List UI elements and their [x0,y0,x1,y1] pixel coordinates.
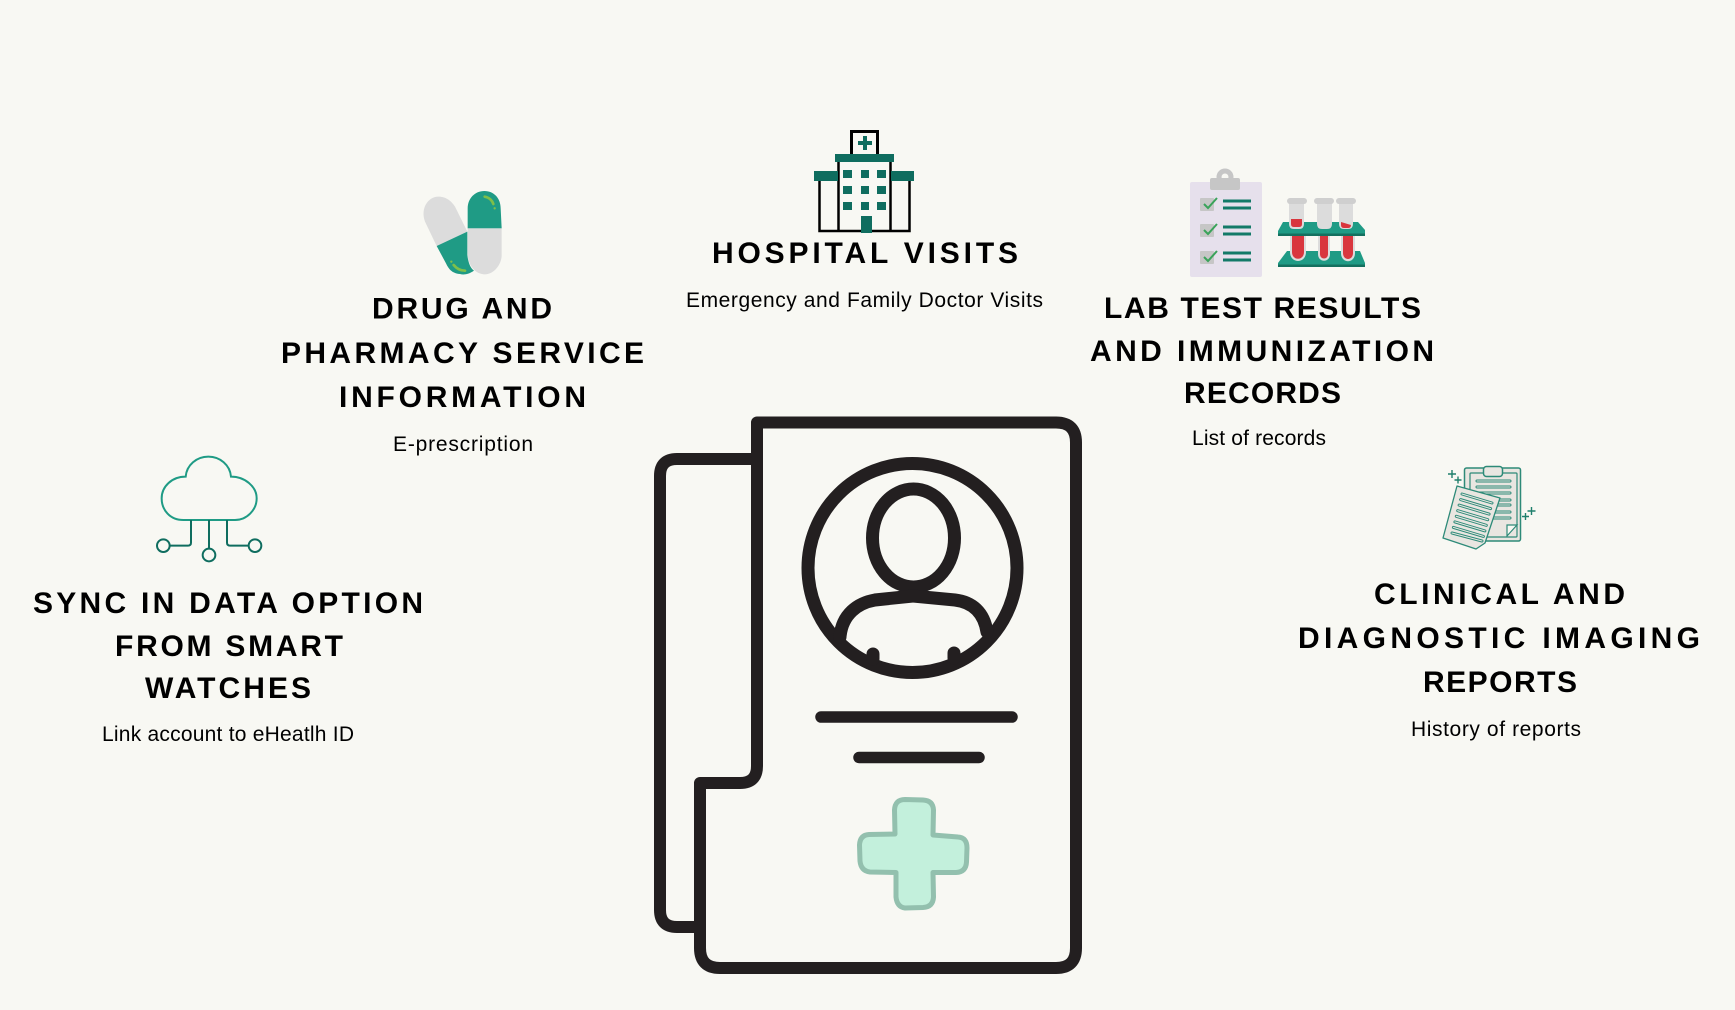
patient avatar [808,464,1017,672]
heading: lab test results and immunization records: AND IMMUNIZATION [1090,335,1434,368]
heading: clinical and diagnostic imaging reports [1298,578,1700,699]
panel: hospital visits [686,132,1043,312]
heading: clinical and diagnostic imaging reports: DIAGNOSTIC IMAGING [1298,622,1700,655]
text: history of reports: History of reports [1411,718,1581,741]
icon: capsules [424,191,502,274]
text: e-prescription: E-prescription [393,433,533,456]
heading: sync in data option from smart watches: FROM SMART [115,630,343,663]
heading: sync in data option from smart watches: SYNC IN DATA OPTION [33,587,423,620]
heading: clinical and diagnostic imaging reports: REPORTS [1423,666,1577,699]
icon: report documents [1443,466,1536,549]
icon: checklist clipboard [1190,171,1262,277]
heading: clinical and diagnostic imaging reports: CLINICAL AND [1374,578,1625,611]
heading: drug and pharmacy service information: DRUG AND [372,292,552,326]
heading: hospital visits: HOSPITAL VISITS [712,237,1018,270]
heading: drug and pharmacy service information: PHARMACY SERVICE [281,337,644,370]
heading: lab test results and immunization records [1090,292,1434,410]
heading: drug and pharmacy service information [281,292,644,414]
heading: sync in data option from smart watches: WATCHES [145,672,311,705]
front page of folder [700,422,1076,968]
icon: hospital [814,132,914,233]
panel: clinical and diagnostic imaging reports [1298,466,1700,741]
icon: cloud network [157,457,261,561]
text: list of records: List of records [1192,427,1326,450]
panel: lab test results and immunization records [1090,171,1434,450]
icon: medical cross [860,800,967,908]
text: link account to eHeatlh ID: Link account to eHeatlh ID [102,723,354,746]
text: emergency and family doctor visits: Emergency and Family Doctor Visits [686,289,1043,312]
heading: lab test results and immunization records: LAB TEST RESULTS [1104,292,1421,325]
illustration: patient record folder [660,422,1076,968]
icon: test tube rack [1278,198,1365,267]
heading: sync in data option from smart watches [33,587,423,705]
heading: drug and pharmacy service information: INFORMATION [339,381,586,414]
panel: sync in data option from smart watches [33,457,423,746]
panel: drug and pharmacy service information [281,191,644,456]
heading: lab test results and immunization records: RECORDS [1184,377,1341,410]
back tab of folder [660,459,757,927]
record text lines [821,717,1012,758]
